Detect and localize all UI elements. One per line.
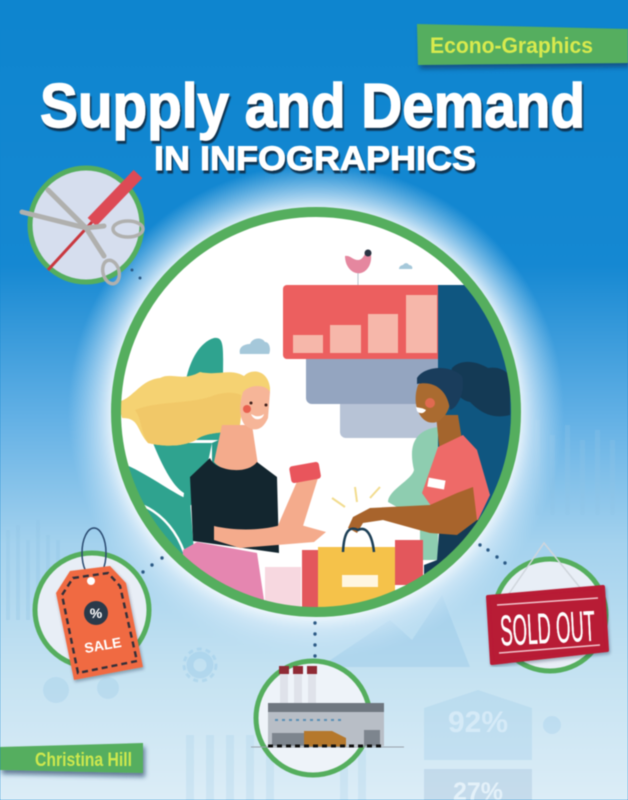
trousers xyxy=(423,518,480,575)
neck xyxy=(214,425,258,471)
red chart panel xyxy=(283,285,438,359)
sale tag badge xyxy=(35,528,149,680)
faint background charts xyxy=(6,420,615,800)
badge circle xyxy=(35,553,149,667)
coral shirt xyxy=(422,435,490,523)
factory badge xyxy=(251,661,404,775)
faint small circles xyxy=(43,677,561,734)
scene contents xyxy=(118,250,528,620)
face xyxy=(416,380,451,423)
faint gear xyxy=(184,649,216,681)
customer figure xyxy=(118,372,326,620)
seller figure xyxy=(348,362,510,575)
grey panel xyxy=(306,359,438,404)
hanging cord xyxy=(506,543,586,598)
title xyxy=(40,72,585,178)
badge circle xyxy=(256,661,370,775)
badge circle xyxy=(30,168,142,282)
plant leaves xyxy=(128,337,224,555)
red bags xyxy=(301,539,424,608)
series name: Econo-Graphics xyxy=(430,33,593,58)
badge circle xyxy=(494,559,606,671)
face xyxy=(240,386,270,429)
faint mountain chart xyxy=(320,595,470,667)
ground line xyxy=(251,746,404,748)
faint bars left xyxy=(6,520,60,620)
navy wall xyxy=(437,284,512,519)
factory building xyxy=(268,703,384,746)
white disc xyxy=(116,212,516,612)
percent circle xyxy=(84,601,108,625)
faint people row xyxy=(186,735,366,800)
mint body xyxy=(388,427,438,560)
bird xyxy=(345,250,372,285)
hair top xyxy=(417,368,463,410)
arm xyxy=(348,487,477,535)
light grey panel xyxy=(340,404,438,438)
percent sign: % xyxy=(90,605,103,621)
author banner xyxy=(0,743,143,773)
sale label: SALE xyxy=(83,634,123,656)
dashed ground xyxy=(268,744,384,748)
main title line: Supply and Demand xyxy=(40,72,585,141)
dashed stitching xyxy=(62,573,137,673)
rising bars xyxy=(293,295,437,353)
small cloud xyxy=(399,263,412,269)
cheek xyxy=(425,398,435,408)
faint bars right xyxy=(535,420,615,515)
connector dots xyxy=(130,268,507,658)
92 percent text: 92% xyxy=(448,706,508,739)
neck xyxy=(436,414,462,447)
chimneys xyxy=(280,672,316,704)
black top xyxy=(190,458,279,553)
cheek xyxy=(243,405,251,413)
bag handle xyxy=(343,529,374,552)
tag string xyxy=(82,528,106,578)
smile xyxy=(416,407,426,413)
cloud xyxy=(240,338,270,354)
scissors badge xyxy=(22,168,143,286)
sparkle lines xyxy=(332,487,380,507)
hair bun xyxy=(451,362,510,416)
sign rules xyxy=(497,598,600,653)
flowing blonde hair xyxy=(118,372,270,446)
arm xyxy=(214,522,326,548)
author name: Christina Hill xyxy=(35,750,132,771)
subtitle line: IN INFOGRAPHICS xyxy=(154,140,476,178)
white shopping bag xyxy=(264,566,302,607)
pink skirt xyxy=(182,542,264,600)
delivery truck xyxy=(304,731,346,747)
scissors xyxy=(22,190,143,286)
series banner xyxy=(417,24,628,65)
eyes xyxy=(250,402,268,406)
hair shading xyxy=(135,393,241,446)
tag hole xyxy=(87,577,95,585)
faint percentage panel 27 xyxy=(424,769,532,800)
forearm raised xyxy=(277,478,318,526)
green ring xyxy=(116,212,516,612)
orange tag xyxy=(56,566,143,680)
yellow bag xyxy=(318,529,395,617)
red pencil xyxy=(48,174,138,270)
sold out badge xyxy=(488,543,607,671)
chimney caps xyxy=(279,666,317,674)
smile xyxy=(251,414,264,419)
phone xyxy=(289,462,321,483)
bag label xyxy=(342,575,378,587)
main circle scene xyxy=(116,212,528,620)
name badge xyxy=(427,478,446,489)
faint percentage panel 92 xyxy=(424,690,532,760)
